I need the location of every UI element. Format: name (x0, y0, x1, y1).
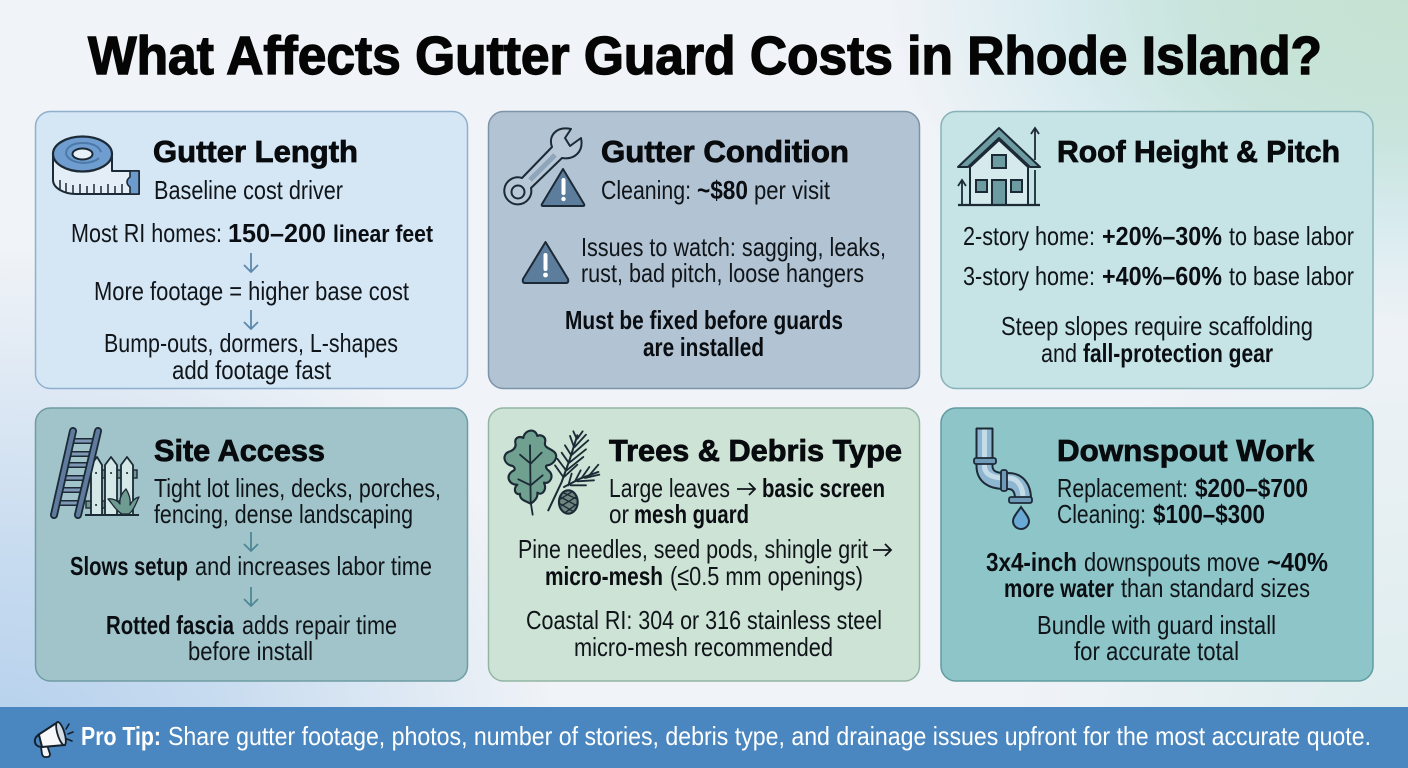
text: 2-story: +20%–30% (1102, 221, 1222, 251)
text: steep slopes (1001, 311, 1313, 368)
panel: roof height and pitch (941, 112, 1373, 388)
text: 3-story: to base labor (1229, 261, 1354, 291)
text: 3-story (963, 261, 1354, 291)
text: coastal recommendation: Coastal RI: 304 or 316 stainless steel (526, 605, 882, 635)
heading: Roof Height & Pitch (1057, 134, 1340, 169)
text: pine needles (518, 534, 891, 591)
text: typical footage: Most RI homes: (71, 218, 222, 248)
icon: megaphone (35, 721, 73, 757)
text: typical footage (71, 218, 433, 248)
text: costs (1057, 473, 1308, 529)
text: issues to watch (581, 232, 886, 288)
text: bundle advice: Bundle with guard install (1037, 610, 1276, 640)
text: pine needles: (≤0.5 mm openings) (670, 561, 863, 591)
text: rotted fascia (106, 610, 397, 666)
panel: downspout work (941, 408, 1373, 681)
text: slows setup: Slows setup (70, 551, 188, 581)
text: downspout capacity (986, 547, 1328, 603)
text: 2-story: 2-story home: (963, 221, 1095, 251)
text: rotted fascia: adds repair time (242, 610, 397, 640)
text: downspout capacity: than standard sizes (1121, 573, 1310, 603)
text: pine needles: Pine needles, seed pods, shingle grit (518, 534, 869, 564)
text: must be fixed (565, 305, 843, 362)
panel: site access (36, 408, 468, 681)
panel: gutter length (36, 112, 468, 388)
text: downspout capacity: ~40% (1267, 547, 1328, 577)
text: footage notes (104, 328, 398, 385)
icon: ladder and fence (54, 431, 139, 515)
text: large leaves: or (609, 499, 629, 529)
text: cleaning cost: ~$80 (697, 175, 748, 205)
text: issues to watch: rust, bad pitch, loose hangers (581, 258, 864, 288)
text: steep slopes: fall-protection gear (1083, 338, 1273, 368)
text: bundle advice (1037, 610, 1276, 666)
text: costs: Cleaning: (1057, 499, 1146, 529)
heading: Downspout Work (1057, 433, 1315, 468)
text: must be fixed: are installed (643, 332, 764, 362)
text: downspout capacity: more water (1004, 573, 1114, 603)
text: typical footage: 150–200 (228, 218, 326, 248)
icon: warning triangle (523, 242, 568, 283)
text: cleaning cost (601, 175, 831, 205)
text: steep slopes: Steep slopes require scaffolding (1001, 311, 1313, 341)
text: 2-story (963, 221, 1354, 251)
text: costs: $100–$300 (1153, 499, 1265, 529)
arrow (244, 310, 258, 329)
icon: house with arrows (958, 128, 1040, 205)
arrow (244, 253, 258, 272)
text: cleaning cost: per visit (754, 175, 831, 205)
text: must be fixed: Must be fixed before guards (565, 305, 843, 335)
text: issues to watch: Issues to watch: sagging, leaks, (581, 232, 886, 262)
heading: Site Access (154, 433, 325, 468)
icon: tape measure (53, 136, 139, 194)
text: 3-story: 3-story home: (963, 261, 1095, 291)
heading: Gutter Condition (601, 134, 849, 169)
text: rotted fascia: before install (188, 636, 313, 666)
text: obstacles: fencing, dense landscaping (154, 499, 413, 529)
text: subtitle: Baseline cost driver (154, 175, 343, 205)
icon: downspout pipe and drop (974, 428, 1032, 529)
text: typical footage: linear feet (333, 221, 433, 248)
text: slows setup: and increases labor time (195, 551, 432, 581)
text: 2-story: to base labor (1229, 221, 1354, 251)
text: downspout capacity: 3x4-inch (986, 547, 1077, 577)
text: costs: Replacement: (1057, 473, 1188, 503)
text: more footage: More footage = higher base cost (94, 276, 410, 306)
heading: Trees & Debris Type (609, 433, 902, 468)
panel: trees and debris type (488, 408, 920, 681)
footer banner: pro tip (0, 707, 1408, 768)
text: downspout capacity: downspouts move (1084, 547, 1260, 577)
text: footage notes: add footage fast (172, 355, 332, 385)
text: obstacles: Tight lot lines, decks, porches, (154, 473, 441, 503)
text: bundle advice: for accurate total (1074, 636, 1239, 666)
text: coastal recommendation (526, 605, 882, 662)
panel: gutter condition (488, 112, 920, 388)
icon: oak leaf and pine sprig (504, 431, 599, 515)
text: large leaves: Large leaves (609, 473, 730, 503)
arrow (244, 532, 258, 551)
text: large leaves (609, 473, 885, 529)
text: slows setup (70, 551, 432, 581)
text: costs: $200–$700 (1195, 473, 1308, 503)
text: large leaves: basic screen (762, 473, 885, 503)
text: footage notes: Bump-outs, dormers, L-shapes (104, 328, 398, 358)
text: 3-story: +40%–60% (1102, 261, 1222, 291)
text: large leaves: mesh guard (634, 499, 749, 529)
text: coastal recommendation: micro-mesh recommended (574, 632, 833, 662)
text: rotted fascia: Rotted fascia (106, 610, 234, 640)
heading: Gutter Length (153, 134, 358, 169)
text: pine needles: micro-mesh (545, 561, 663, 591)
title: What Affects Gutter Guard Costs in Rhode Island? (88, 26, 1322, 86)
text: pro tip: Pro Tip: (81, 721, 161, 751)
text: cleaning cost: Cleaning: (601, 175, 691, 205)
icon: wrench and warning (504, 128, 584, 206)
arrow (244, 587, 258, 606)
text: obstacles (154, 473, 441, 529)
text: steep slopes: and (1041, 338, 1077, 368)
